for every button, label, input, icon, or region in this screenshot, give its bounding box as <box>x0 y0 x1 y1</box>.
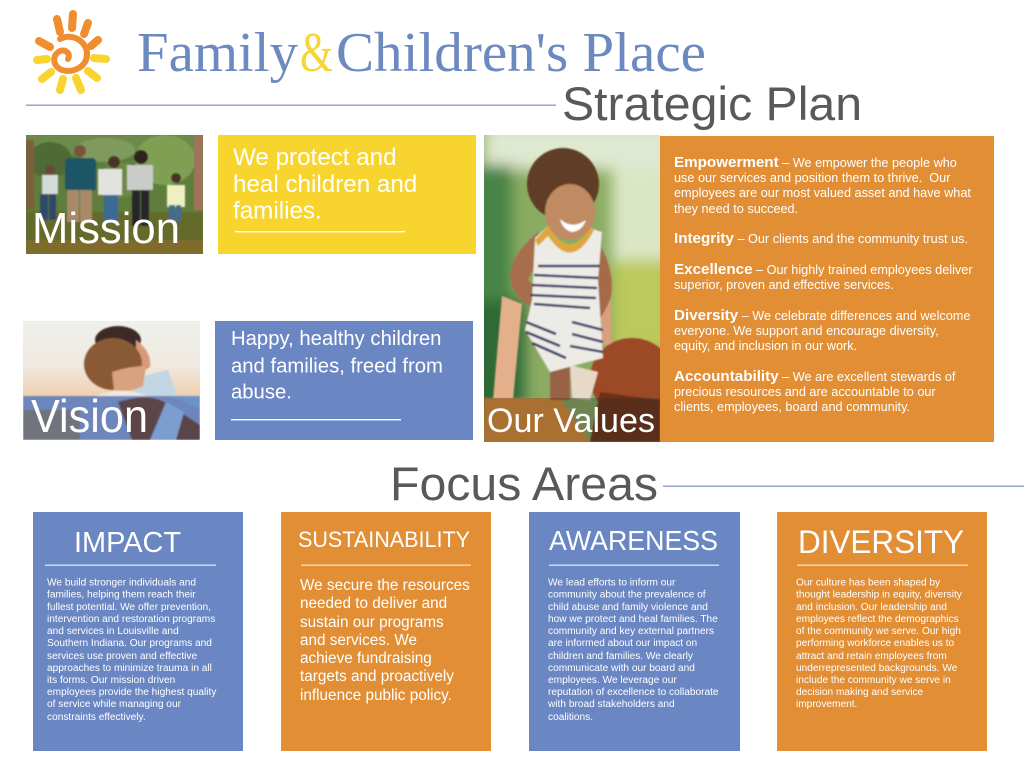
panel: mission statement: We protect and <box>233 144 397 171</box>
values photo: label band <box>484 398 660 442</box>
panel: Sustainability: sustain our programs <box>300 614 444 631</box>
panel: Impact: intervention and restoration programs <box>47 614 215 625</box>
value: Empowerment: Empowerment – We empower the people who <box>674 154 957 171</box>
label: Mission: Mission <box>32 204 180 253</box>
value: Empowerment: they need to succeed. <box>674 202 798 216</box>
panel: mission statement: families. <box>233 198 322 224</box>
panel: Diversity: attract and retain employees from <box>796 651 947 662</box>
panel: Awareness: reputation of excellence to collaborate <box>548 687 719 698</box>
value: Empowerment <box>674 154 971 216</box>
panel: Sustainability: We secure the resources <box>300 577 470 594</box>
panel: Diversity: Our culture has been shaped by <box>796 578 941 588</box>
panel: Awareness: children and families. We clearly <box>548 651 694 662</box>
panel: Impact: approaches to minimize trauma in all <box>47 663 212 674</box>
panel: Impact: and services in Louisville and <box>47 626 179 637</box>
value: Diversity: everyone. We support and encourage diversity, <box>674 324 939 338</box>
logo: organisation name <box>137 22 706 84</box>
panel: mission statement <box>218 135 476 254</box>
panel: Awareness: coalitions. <box>548 712 593 723</box>
panel: values list <box>660 136 994 442</box>
panel: Impact: of service while managing our <box>47 699 182 710</box>
panel: Sustainability: influence public policy. <box>300 687 452 704</box>
panel: mission statement: heal children and <box>233 171 417 198</box>
panel: Sustainability: targets and proactively <box>300 668 454 685</box>
panel: Impact: constraints effectively. <box>47 712 146 723</box>
panel: Diversity: employees reflect the demographics <box>796 614 959 625</box>
panel: Sustainability: achieve fundraising <box>300 650 432 667</box>
panel: Impact: IMPACT <box>74 527 181 559</box>
panel: vision statement: Happy, healthy children <box>231 328 441 350</box>
value: Excellence: Excellence – Our highly trained employees deliver <box>674 261 973 278</box>
panel: vision statement: and families, freed from <box>231 356 443 378</box>
value: Accountability: clients, employees, board and community. <box>674 400 910 414</box>
panel: Awareness <box>529 512 740 751</box>
values photo: child head <box>527 148 599 220</box>
panel: Awareness: community and key external partners <box>548 626 714 637</box>
label: Vision: Vision <box>31 390 148 442</box>
value: Excellence <box>674 261 973 292</box>
panel: Impact: Southern Indiana. Our programs and <box>47 638 212 649</box>
panel: Sustainability <box>281 512 491 751</box>
panel: Awareness: communicate with our board and <box>548 663 695 674</box>
panel: Impact: We build stronger individuals and <box>47 578 196 588</box>
panel: vision photo <box>23 321 200 440</box>
panel: Awareness: child abuse and family violence and <box>548 602 708 613</box>
value: Accountability <box>674 368 956 414</box>
panel: Sustainability: needed to deliver and <box>300 595 447 612</box>
panel: Diversity: include the community we serve in <box>796 675 951 686</box>
panel: vision statement: abuse. <box>231 382 292 404</box>
panel: Sustainability: and services. We <box>300 632 417 649</box>
logo: organisation name: Children's Place <box>336 22 706 84</box>
value: Diversity: equity, and inclusion in our work. <box>674 339 857 353</box>
panel: Diversity <box>777 512 987 751</box>
logo: organisation name: Family <box>137 22 298 84</box>
heading: Focus Areas: Focus Areas <box>390 458 658 511</box>
panel: Awareness: community about the prevalence of <box>548 590 706 600</box>
value: Diversity: Diversity – We celebrate differences and welcome <box>674 307 970 324</box>
panel: Impact: employees provide the highest quality <box>47 687 217 698</box>
values photo: child legs <box>549 366 571 400</box>
panel: values photo <box>484 135 660 442</box>
panel: Diversity: improvement. <box>796 699 857 710</box>
panel: Impact <box>33 512 243 751</box>
panel: vision statement <box>215 321 473 440</box>
values photo: adult arm <box>493 296 522 400</box>
label: Our Values: Our Values <box>487 402 655 440</box>
value: Diversity <box>674 307 970 353</box>
panel: Diversity: and inclusion. Our leadership and <box>796 602 947 613</box>
panel: Diversity: thought leadership in equity, diversity <box>796 590 963 600</box>
panel: Impact: families, helping them reach their <box>47 590 196 600</box>
panel: Impact: its forms. Our mission driven <box>47 675 175 686</box>
panel: Diversity: decision making and service <box>796 687 924 698</box>
mission photo: family <box>40 145 185 226</box>
logo: organisation name: & <box>300 22 333 84</box>
panel: Sustainability: SUSTAINABILITY <box>298 527 470 552</box>
logo: sun icon <box>37 14 106 90</box>
values photo: child arms <box>510 232 540 306</box>
panel: mission photo <box>26 135 203 254</box>
panel: Awareness: with broad stakeholders and <box>547 699 675 710</box>
panel: Awareness: employees. We leverage our <box>548 675 677 686</box>
value: Accountability: precious resources and are accountable to our <box>674 385 936 399</box>
value: Excellence: superior, proven and effective services. <box>674 278 894 292</box>
panel: Awareness: We lead efforts to inform our <box>548 578 676 588</box>
value: Accountability: Accountability – We are excellent stewards of <box>674 368 956 385</box>
panel: Impact: fullest potential. We offer prevention, <box>47 602 211 613</box>
value: Empowerment: use our services and position them to thrive. Our <box>674 171 951 185</box>
panel: Awareness: how we protect and heal families. The <box>548 614 718 625</box>
value: Empowerment: employees are our most valued asset and have what <box>674 186 971 200</box>
panel: Diversity: underrepresented backgrounds. We <box>796 663 958 674</box>
value: Integrity: Integrity – Our clients and the community trust us. <box>674 230 968 247</box>
panel: Impact: services use proven and effective <box>47 651 197 662</box>
panel: Diversity: performing workforce enables us to <box>796 638 955 649</box>
values photo: adult hair and shirt <box>590 337 660 408</box>
panel: Awareness: are informed about our impact on <box>548 638 697 649</box>
panel: Awareness: AWARENESS <box>549 525 718 556</box>
panel: Diversity: DIVERSITY <box>798 524 964 560</box>
panel: Diversity: of the community we serve. Our high <box>796 626 961 637</box>
values photo: child outfit <box>525 226 603 372</box>
heading: Strategic Plan: Strategic Plan <box>562 78 862 131</box>
